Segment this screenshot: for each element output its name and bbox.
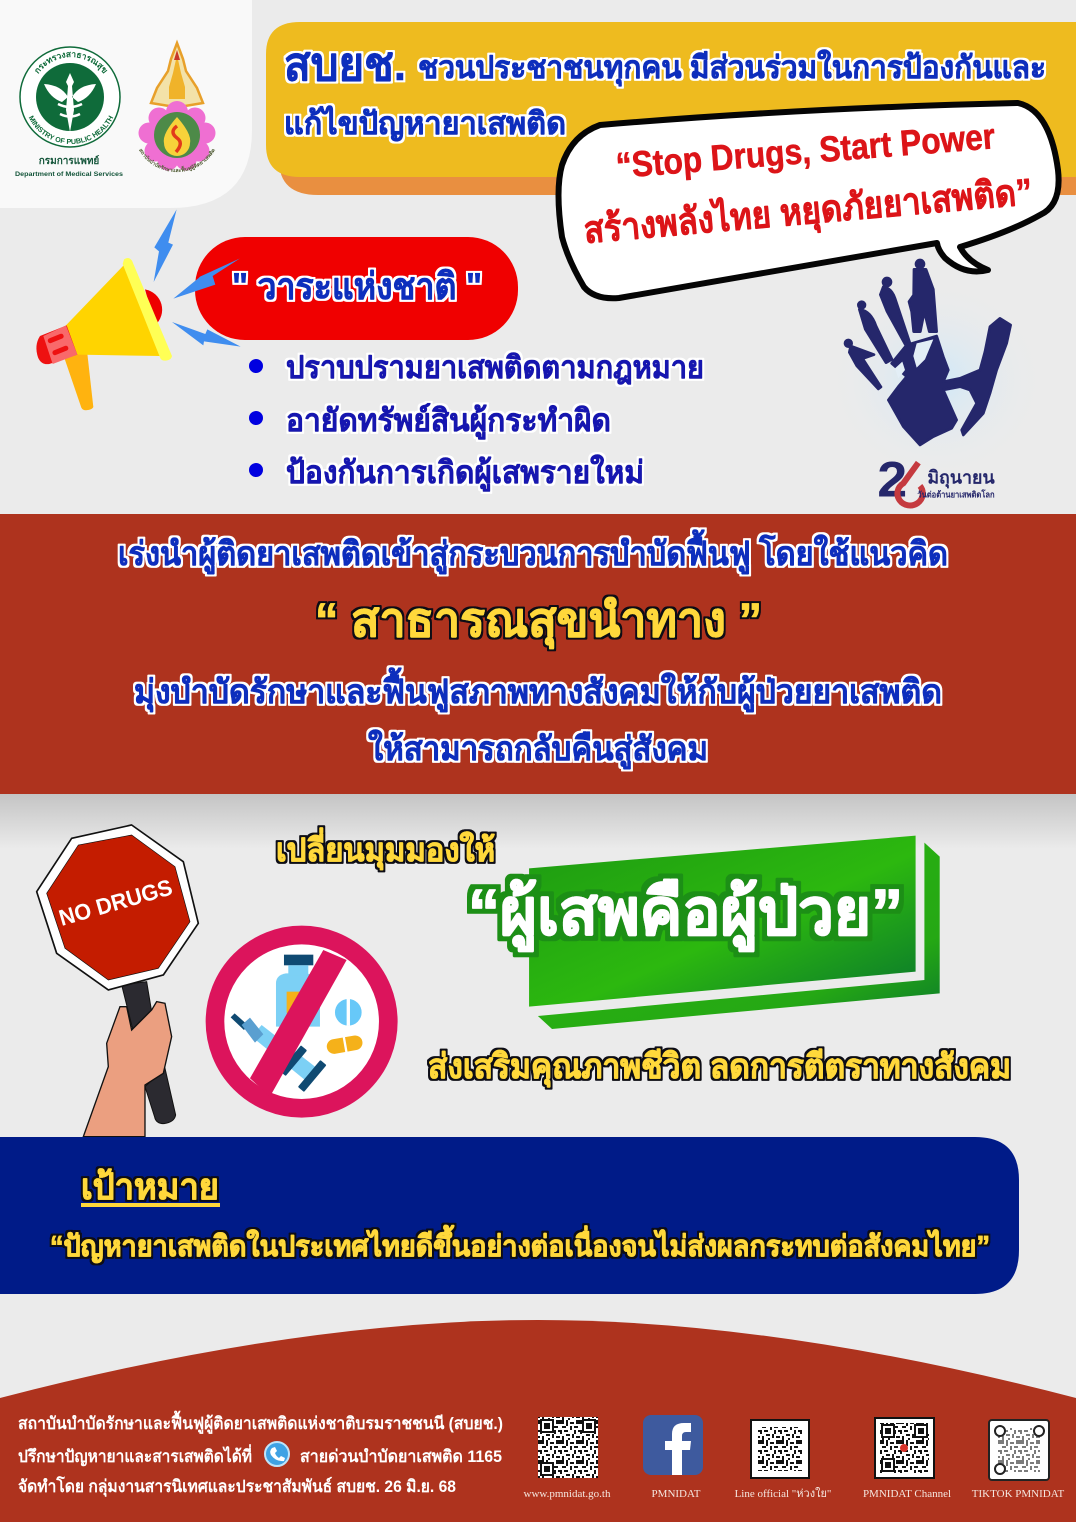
logo: institute lotus: [138, 40, 216, 172]
green banner: users are patients: [468, 836, 940, 1029]
bullet list: อายัดทรัพย์สินผู้กระทำผิด: [286, 403, 611, 440]
QR: channel: [863, 1418, 951, 1500]
date logo: 26 June: มิถุนายน: [927, 467, 995, 489]
icon: facebook: PMNIDAT: [652, 1488, 701, 1500]
bullet list: ปราบปรามยาเสพติดตามกฎหมาย: [286, 350, 704, 385]
yellow banner: [266, 22, 1076, 195]
brown band: public health: ให้สามารถกลับคืนสู่สังคม: [368, 729, 708, 770]
icon: hand with globe: [827, 260, 1047, 508]
brown band: public health: เร่งนำผู้ติดยาเสพติดเข้าสู่กระบวนการบำบัดฟื้นฟู โดยใช้แนวคิด: [118, 529, 948, 575]
QR: line official: [735, 1420, 831, 1500]
caption: quality of life: ส่งเสริมคุณภาพชีวิต ลดการตีตราทางสังคม: [428, 1048, 1011, 1088]
QR: channel: PMNIDAT Channel: [863, 1488, 951, 1500]
speech bubble: สร้างพลังไทย หยุดภัยยาเสพติด”: [582, 169, 1034, 254]
bullet list: ป้องกันการเกิดผู้เสพรายใหม่: [286, 454, 644, 492]
icon: phone: [265, 1442, 289, 1466]
footer text: สายด่วนบำบัดยาเสพติด 1165: [300, 1447, 502, 1466]
blue panel: goal: “ปัญหายาเสพติดในประเทศไทยดีขึ้นอย่างต่อเนื่องจนไม่ส่งผลกระทบต่อสังคมไทย”: [50, 1224, 990, 1264]
QR: tiktok: TIKTOK PMNIDAT: [972, 1488, 1064, 1500]
blue panel: goal: เป้าหมาย: [81, 1166, 219, 1207]
QR: website: [524, 1417, 611, 1500]
footer: [0, 1320, 1076, 1522]
blue panel: goal: [0, 1137, 1019, 1294]
date logo: 26 June: [877, 452, 995, 508]
date logo: 26 June: วันต่อต้านยาเสพติดโลก: [917, 488, 995, 499]
speech bubble: [558, 103, 1059, 298]
logo: Ministry of Public Health: [15, 46, 123, 178]
caption: change perspective: เปลี่ยนมุมมองให้: [276, 827, 495, 871]
date logo: 26 June: 2: [877, 452, 907, 508]
banner heading: [284, 38, 1046, 142]
QR: line official: Line official "ห่วงใย": [735, 1487, 831, 1500]
icon: megaphone: [36, 209, 241, 410]
footer text: ปรึกษาปัญหายาและสารเสพติดได้ที่: [18, 1444, 252, 1467]
icon: lightning: [154, 209, 241, 347]
logo: Ministry of Public Health: MINISTRY OF PUBLIC HEALTH: [28, 115, 114, 144]
speech bubble: “Stop Drugs, Start Power: [614, 115, 996, 186]
banner heading: แก้ไขปัญหายาเสพติด: [284, 105, 566, 142]
green banner: users are patients: “ผู้เสพคือผู้ป่วย”: [468, 876, 903, 952]
logo panel: [0, 0, 252, 208]
band shadow: [0, 794, 1076, 849]
footer text: [18, 1410, 503, 1497]
icon: no drugs sign: NO DRUGS: [56, 874, 175, 931]
brown band: public health: มุ่งบำบัดรักษาและฟื้นฟูสภาพทางสังคมให้กับผู้ป่วยยาเสพติด: [134, 667, 942, 713]
red pill: national agenda: [195, 237, 518, 340]
bullet list: [249, 350, 704, 492]
logo: Ministry of Public Health: กรมการแพทย์: [39, 155, 99, 167]
brown band: public health: “ สาธารณสุขนำทาง ”: [315, 593, 762, 649]
banner heading: ชวนประชาชนทุกคน มีส่วนร่วมในการป้องกันและ: [418, 49, 1046, 87]
logo: institute lotus: สถาบันบำบัดรักษาและฟื้นฟูผู้ติดยาเสพติด: [139, 148, 216, 172]
brown band: public health: [0, 514, 1076, 794]
red pill: national agenda: " วาระแห่งชาติ ": [232, 266, 482, 307]
banner heading: สบยช.: [284, 38, 406, 90]
footer text: จัดทำโดย กลุ่มงานสารนิเทศและประชาสัมพันธ์ สบยช. 26 มิ.ย. 68: [18, 1476, 456, 1497]
icon: no drugs sign: [37, 825, 198, 1137]
icon: prohibited medicine: [215, 935, 388, 1108]
QR: tiktok: [972, 1420, 1064, 1500]
QR: website: www.pmnidat.go.th: [524, 1488, 611, 1500]
logo: Ministry of Public Health: Department of Medical Services: [15, 171, 123, 178]
footer text: สถาบันบำบัดรักษาและฟื้นฟูผู้ติดยาเสพติดแห่งชาติบรมราชชนนี (สบยช.): [18, 1410, 503, 1435]
logo: Ministry of Public Health: กระทรวงสาธารณสุข: [35, 52, 108, 74]
icon: facebook: [643, 1415, 703, 1500]
